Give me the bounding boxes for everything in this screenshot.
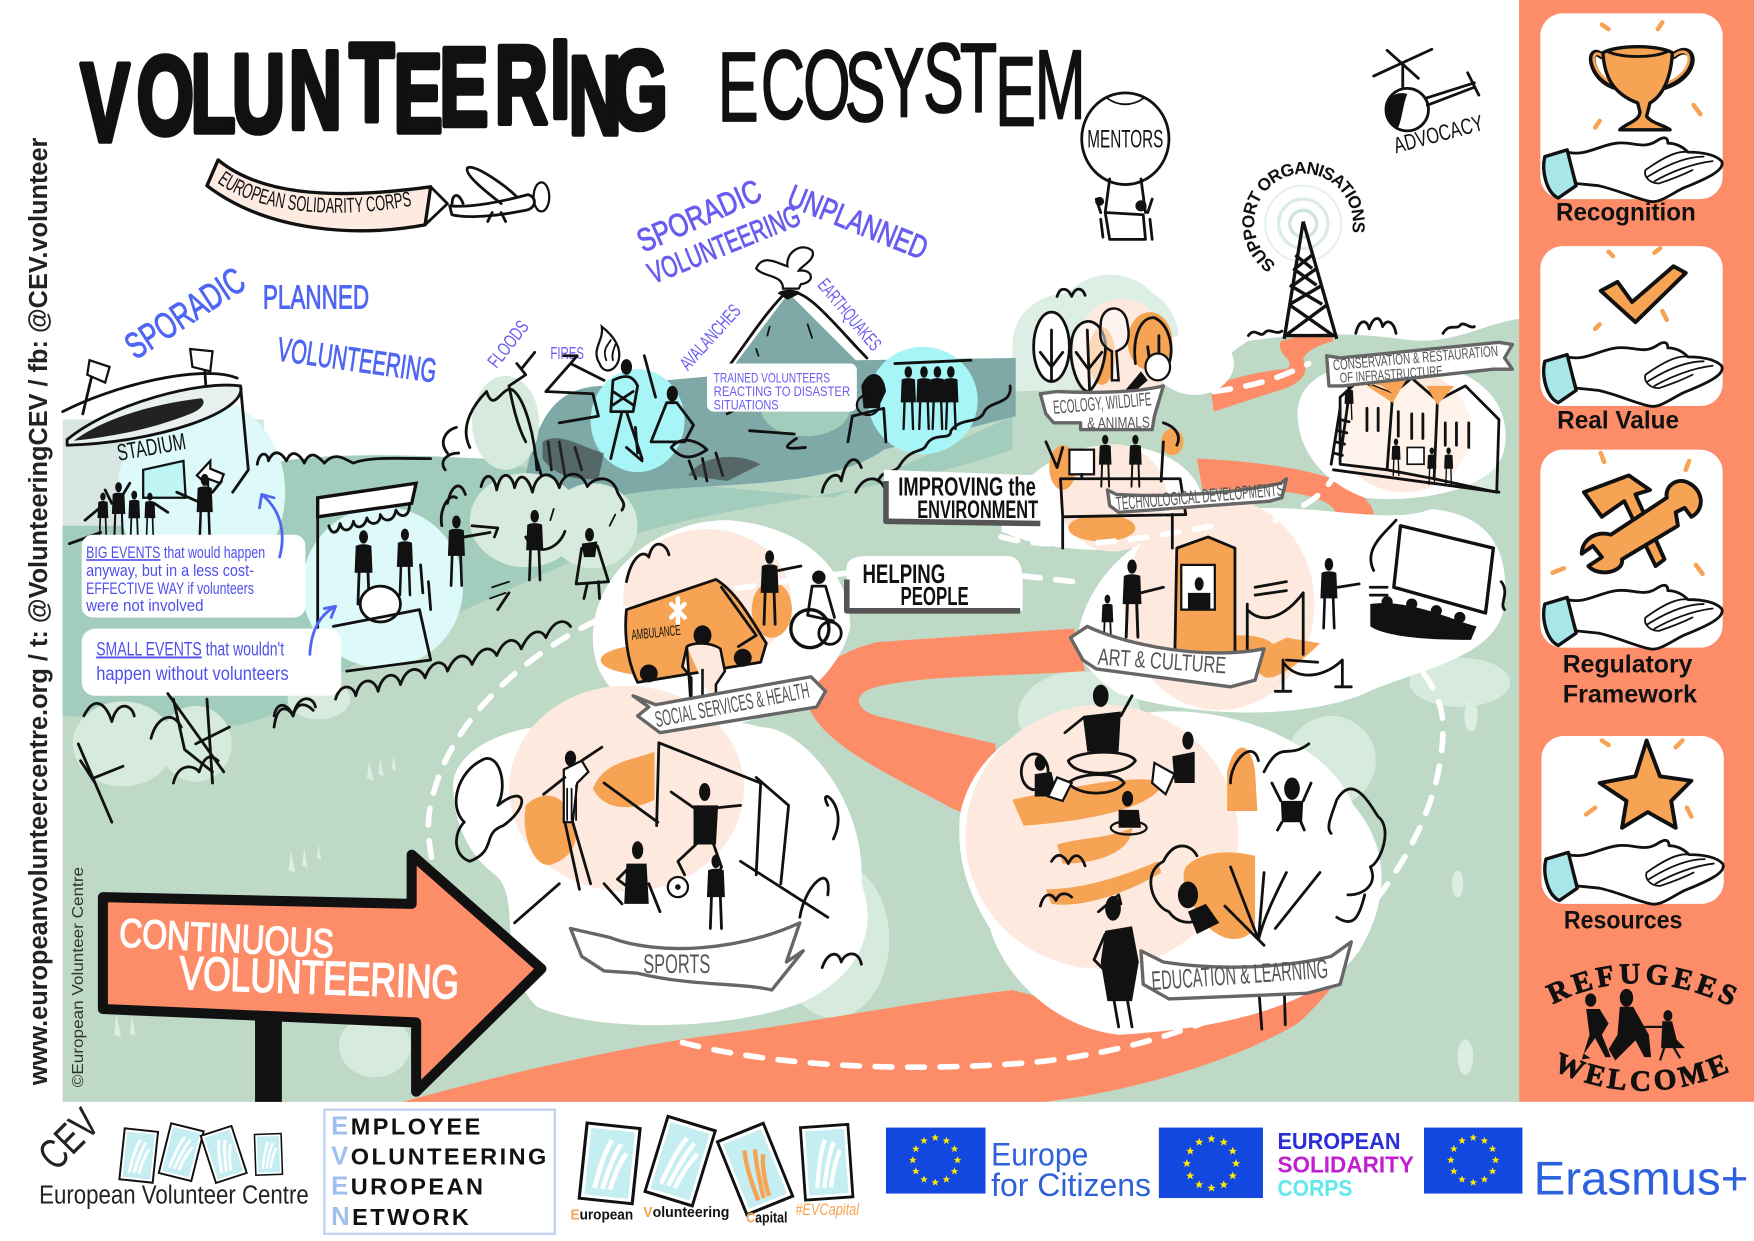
- helicopter: advocacy: ADVOCACY: [1391, 110, 1486, 158]
- technological developments ribbon: [1107, 479, 1286, 515]
- arrow from small events to stall: [310, 606, 336, 654]
- logo: Erasmus+: [1424, 1128, 1748, 1205]
- radio tower: support organisations: [1242, 162, 1365, 340]
- logo: European Volunteering Capital: Capital: [746, 1211, 788, 1227]
- small events card: happen without volunteers: [96, 664, 289, 685]
- radio tower: support organisations: SUPPORT ORGANISATIONS: [1242, 162, 1365, 272]
- heading: sporadic unplanned volunteering: UNPLANNED: [783, 178, 933, 267]
- label: regulatory framework: Regulatory: [1563, 651, 1693, 678]
- market stall: [318, 483, 615, 671]
- peach scene highlights: [509, 299, 1471, 969]
- ecology ribbon: ECOLOGY, WILDLIFE: [1052, 389, 1152, 419]
- copyright: ©European Volunteer Centre: [70, 867, 87, 1087]
- label: regulatory framework: [1563, 651, 1697, 708]
- improving the environment label: IMPROVING the: [898, 474, 1036, 502]
- logo: European Volunteering Capital: Volunteering: [643, 1205, 729, 1221]
- title: VOLUNTEERING: [80, 17, 668, 166]
- logo: European Solidarity Corps: SOLIDARITY: [1277, 1151, 1414, 1177]
- signpost: continuous volunteering arrow: CONTINUOUS: [118, 910, 335, 967]
- tower grass: [1248, 319, 1474, 336]
- sports ribbon: SPORTS: [643, 949, 710, 979]
- big events card: were not involved: [85, 597, 204, 615]
- helping people label: PEOPLE: [900, 583, 969, 611]
- orange road: [403, 333, 1375, 1102]
- panel card: recognition: [1540, 13, 1723, 226]
- logo: Employee Volunteering European Network: EMPLOYEE: [331, 1112, 483, 1140]
- logo: Europe for Citizens: Europe: [991, 1137, 1088, 1173]
- light green hill behind ecology: [1012, 275, 1180, 392]
- education ribbon: [1141, 942, 1351, 999]
- art and culture ribbon: ART & CULTURE: [1097, 644, 1227, 678]
- big events card: anyway, but in a less cost-: [86, 562, 254, 580]
- improving the environment label: ENVIRONMENT: [917, 497, 1038, 524]
- technological developments ribbon: TECHNOLOGICAL DEVELOPMENTS: [1115, 480, 1284, 515]
- logo: Erasmus+: Erasmus+: [1534, 1152, 1748, 1205]
- heading: sporadic planned volunteering: [117, 259, 439, 390]
- sports ribbon: [570, 923, 803, 990]
- green grass tufts: [114, 700, 1478, 1075]
- dashed white path: [428, 364, 1443, 1067]
- card: trained volunteers: TRAINED VOLUNTEERS: [714, 370, 830, 386]
- stadium: [63, 349, 248, 544]
- hot air balloon: mentors: [1082, 93, 1169, 239]
- card: trained volunteers: SITUATIONS: [714, 396, 779, 412]
- signpost: continuous volunteering arrow: [103, 855, 541, 1102]
- card: trained volunteers: REACTING TO DISASTER: [714, 383, 850, 399]
- small events card: SMALL EVENTS that wouldn't: [96, 640, 285, 661]
- heading: sporadic planned volunteering: PLANNED: [263, 280, 369, 317]
- stadium: STADIUM: [115, 428, 188, 466]
- mountain range: [526, 293, 1016, 497]
- social services ribbon: SOCIAL SERVICES & HEALTH: [653, 678, 811, 732]
- panel card: resources: [1541, 736, 1724, 934]
- light bushes: [73, 376, 1510, 1077]
- card: trained volunteers: [707, 364, 857, 412]
- volcano: [725, 247, 867, 375]
- plants bottom left: [78, 694, 313, 822]
- logo: Employee Volunteering European Network: EUROPEAN: [331, 1173, 485, 1201]
- heading: sporadic planned volunteering: SPORADIC: [117, 259, 252, 367]
- ecology trees scene: [1034, 289, 1171, 394]
- label: regulatory framework: Framework: [1563, 681, 1697, 708]
- mentoring group scene: [848, 360, 971, 442]
- orange accent patches: [525, 312, 1320, 939]
- right side panel: [1519, 0, 1754, 1102]
- helicopter: advocacy: [1374, 49, 1486, 158]
- grass line near stadium: [257, 453, 431, 464]
- title: ECOSYSTEM: [718, 24, 1086, 147]
- logo: European Solidarity Corps: EUROPEAN: [1277, 1128, 1401, 1154]
- ambulance scene: social services and health: [626, 550, 841, 711]
- conservation ribbon: [1327, 342, 1512, 386]
- logo: European Solidarity Corps: [1159, 1128, 1414, 1201]
- logo: European Volunteering Capital: [570, 1116, 860, 1227]
- big events card: EFFECTIVE WAY if volunteers: [86, 580, 254, 598]
- refugees welcome badge: WELCOME: [1559, 1052, 1729, 1092]
- refugees welcome badge: [1544, 964, 1737, 1092]
- disaster type labels: FLOODS: [484, 317, 534, 372]
- helping people label: HELPING: [862, 559, 945, 589]
- art and culture scene: [1102, 520, 1505, 691]
- big events card: [82, 535, 305, 617]
- disaster type labels: [484, 275, 885, 375]
- dark teal hillside: [63, 416, 1012, 728]
- education ribbon: EDUCATION & LEARNING: [1151, 954, 1329, 996]
- plane with banner: European Solidarity Corps: EUROPEAN SOLIDARITY CORPS: [218, 170, 411, 213]
- label: recognition: Recognition: [1556, 199, 1696, 226]
- logo: European Volunteer Centre: CEV: [30, 1100, 109, 1179]
- ecology ribbon: & ANIMALS: [1087, 414, 1150, 432]
- logo: Europe for Citizens: [886, 1128, 1151, 1203]
- logo: European Volunteer Centre: European Volunteer Centre: [39, 1182, 309, 1210]
- logo: Employee Volunteering European Network: NETWORK: [331, 1203, 471, 1231]
- plane with banner: European Solidarity Corps: [205, 158, 550, 232]
- conservation houses scene: [1331, 378, 1499, 492]
- ecology ribbon: [1040, 386, 1163, 432]
- sports scene: [456, 743, 861, 968]
- logo: European Volunteering Capital: #EVCapital: [795, 1200, 860, 1219]
- stadium ground: [63, 419, 264, 543]
- label: resources: Resources: [1564, 907, 1682, 934]
- panel card: real value: [1540, 246, 1723, 434]
- ambulance scene: social services and health: AMBULANCE: [631, 623, 682, 644]
- conservation ribbon: OF INFRASTRUCTURE: [1339, 362, 1443, 386]
- disaster type labels: EARTHQUAKES: [813, 275, 885, 355]
- logo: Employee Volunteering European Network: [324, 1110, 555, 1234]
- art and culture ribbon: [1071, 626, 1264, 687]
- logo: European Volunteer Centre: [30, 1100, 309, 1210]
- heading: sporadic unplanned volunteering: SPORADIC: [631, 173, 767, 259]
- small events card: [82, 629, 341, 696]
- label: real value: Real Value: [1557, 407, 1679, 434]
- disaster type labels: AVALANCHES: [676, 301, 746, 375]
- left contact text: www.europeanvolunteercentre.org / t: @VolunteeringCEV / fb: @CEV.volunteer: [25, 138, 53, 1086]
- title: [80, 17, 1086, 166]
- disaster type labels: FIRES: [550, 343, 584, 363]
- panel card: regulatory framework: [1540, 450, 1723, 708]
- logo: Europe for Citizens: for Citizens: [991, 1167, 1151, 1203]
- white scene blobs: [453, 332, 1506, 1035]
- logo: European Solidarity Corps: CORPS: [1277, 1175, 1352, 1201]
- improving the environment label: [884, 470, 1040, 524]
- signpost: continuous volunteering arrow: VOLUNTEERING: [179, 946, 460, 1009]
- big events card: BIG EVENTS that would happen: [86, 544, 265, 562]
- disaster scene: [443, 327, 805, 481]
- helping people label: [847, 556, 1023, 611]
- arrow from big events to stadium: [260, 494, 282, 557]
- logo: European Volunteering Capital: European: [570, 1207, 633, 1223]
- education and learning scene: [1021, 685, 1385, 1029]
- logo: Employee Volunteering European Network: VOLUNTEERING: [331, 1142, 549, 1170]
- refugees welcome badge: REFUGEES: [1544, 964, 1737, 1005]
- hot air balloon: mentors: MENTORS: [1087, 127, 1163, 154]
- conservation ribbon: CONSERVATION & RESTAURATION: [1332, 343, 1499, 374]
- bushes and grass on hillside: [274, 386, 1010, 716]
- social services ribbon: [633, 677, 826, 733]
- heading: sporadic planned volunteering: VOLUNTEERING: [275, 331, 439, 390]
- heading: sporadic unplanned volunteering: VOLUNTEERING: [644, 200, 805, 291]
- landscape base: [63, 319, 1519, 1102]
- technology desk scene: [1046, 423, 1186, 548]
- cyan scene circles: [117, 397, 463, 668]
